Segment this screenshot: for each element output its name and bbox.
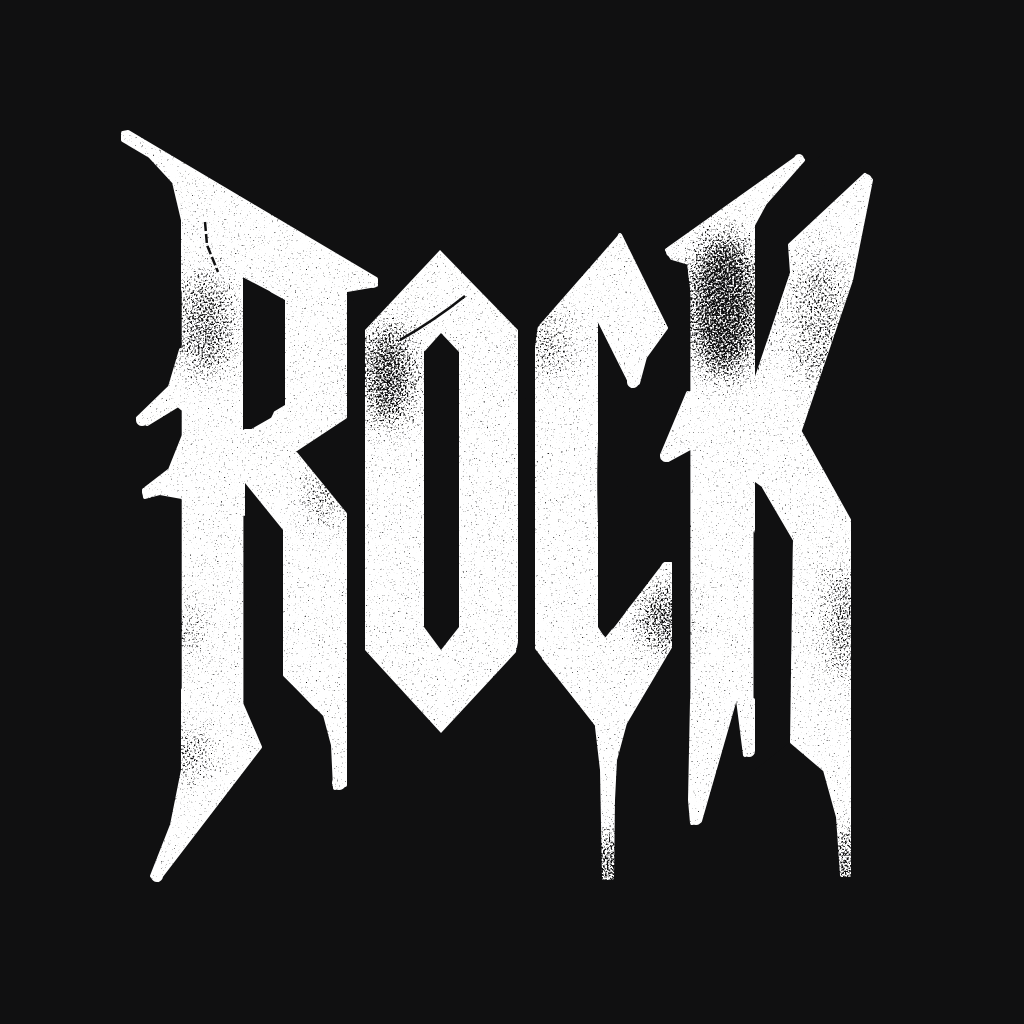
poster: ROCK logo [121,130,873,882]
rounded tips [123,133,870,880]
wordmark: distressed ROCK [121,130,873,882]
letter K: K [690,37,856,881]
inner cut-outs [243,150,868,770]
letter C: C [540,75,684,890]
letter O: O [363,96,519,878]
worn ink patches [172,229,863,908]
scratch marks [205,222,465,340]
letter R: R [182,37,341,864]
decorative spurs and drips [123,132,871,880]
